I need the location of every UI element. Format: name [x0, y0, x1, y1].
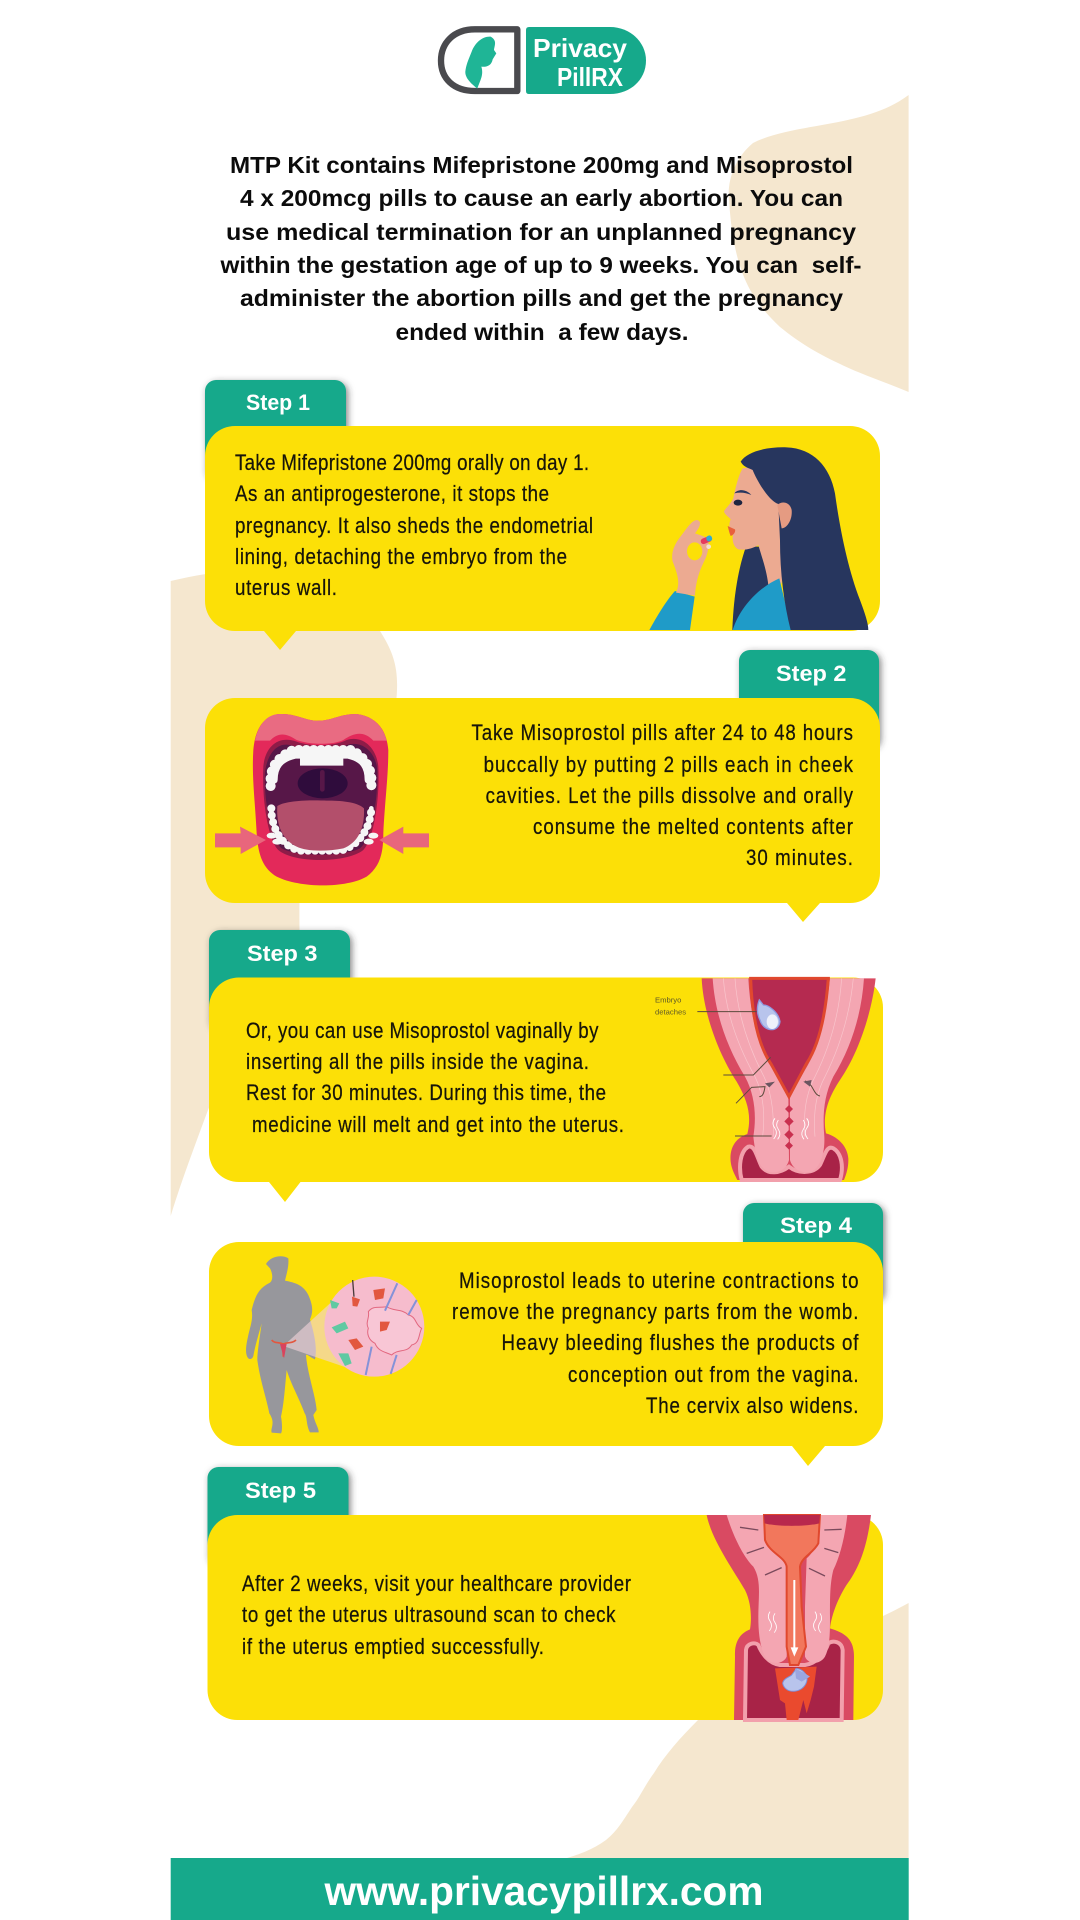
step 2 text	[472, 722, 854, 870]
step 2 text: 30 minutes.	[746, 847, 853, 870]
website url: www.privacypillrx.com	[324, 1868, 764, 1914]
step 1 text: Take Mifepristone 200mg orally on day 1.	[235, 452, 589, 475]
step 3 text: medicine will melt and get into the uterus.	[252, 1114, 624, 1137]
step 4 text: conception out from the vagina.	[568, 1364, 859, 1387]
step 5 tab	[208, 1467, 348, 1565]
upper teeth	[270, 750, 371, 786]
step 1 tab	[205, 380, 346, 480]
step 2 tab	[739, 650, 879, 748]
footer bar	[171, 1858, 909, 1920]
icon: body silhouette with magnified tissue	[246, 1256, 424, 1433]
logo text: Privacy	[533, 33, 628, 63]
logo	[441, 27, 646, 94]
step 4 text: remove the pregnancy parts from the womb.	[452, 1301, 858, 1324]
intro text block: administer the abortion pills and get the pregnancy	[240, 285, 843, 311]
step 3 text: Rest for 30 minutes. During this time, the	[246, 1082, 606, 1105]
lower teeth	[271, 808, 371, 851]
step 1 text: lining, detaching the embryo from the	[235, 546, 567, 569]
step 5 text	[242, 1573, 631, 1659]
icon: uterus with embryo detaching: detaches	[655, 1008, 686, 1017]
step 5 card	[208, 1515, 883, 1720]
step 2 text: buccally by putting 2 pills each in cheek	[484, 754, 854, 777]
intro text block: use medical termination for an unplanned pregnancy	[226, 219, 856, 245]
step 3 text: inserting all the pills inside the vagina.	[246, 1051, 589, 1074]
intro text block: within the gestation age of up to 9 weeks. You can self-	[219, 252, 861, 278]
icon: woman taking pill	[649, 447, 868, 630]
step 4 card	[209, 1242, 883, 1466]
logo: PillRX	[557, 62, 624, 92]
icon: open mouth with arrows	[215, 714, 429, 885]
step 1 heading: Step 1	[246, 390, 310, 415]
panel: step 5	[208, 1467, 883, 1720]
step 2 card	[205, 698, 880, 922]
step 1 card	[205, 426, 880, 650]
icon: uterus with embryo detaching: Embryo	[655, 996, 681, 1005]
step 4 heading: Step 4	[780, 1213, 853, 1238]
step 3 tab	[209, 930, 350, 1030]
step 5 text: After 2 weeks, visit your healthcare provider	[242, 1573, 631, 1596]
step 4 text: Misoprostol leads to uterine contractions to	[459, 1270, 859, 1293]
step 4 text: The cervix also widens.	[646, 1395, 859, 1418]
step 5 text: if the uterus emptied successfully.	[242, 1636, 544, 1659]
step 4 tab	[743, 1203, 883, 1301]
step 4 text: Heavy bleeding flushes the products of	[502, 1332, 859, 1355]
step 5 heading: Step 5	[245, 1478, 316, 1503]
step 2 text: Take Misoprostol pills after 24 to 48 hours	[472, 722, 853, 745]
step 1 text: uterus wall.	[235, 577, 337, 600]
logo woman profile	[465, 37, 496, 89]
background blob: left	[171, 571, 397, 1216]
intro text block	[219, 152, 861, 345]
panel: step 2	[205, 650, 880, 922]
step 3 heading: Step 3	[247, 941, 318, 966]
step 1 text	[235, 452, 593, 600]
step 2 text: cavities. Let the pills dissolve and orally	[486, 785, 854, 808]
intro text block: MTP Kit contains Mifepristone 200mg and Misoprostol	[230, 152, 853, 178]
background blob: top right	[729, 95, 909, 392]
step 2 heading: Step 2	[776, 661, 846, 686]
step 1 text: pregnancy. It also sheds the endometrial	[235, 515, 593, 538]
step 4 text	[452, 1270, 859, 1418]
background blob: bottom right	[567, 1603, 909, 1858]
panel: step 3	[209, 930, 883, 1202]
panel: step 4	[209, 1203, 883, 1466]
logo teal half	[526, 27, 646, 94]
icon: uterus with embryo detaching	[655, 978, 876, 1180]
panel: step 1	[205, 380, 880, 650]
icon: uterus expelling contents	[707, 1515, 871, 1720]
intro text block: 4 x 200mcg pills to cause an early abortion. You can	[240, 185, 843, 211]
step 1 text: As an antiprogesterone, it stops the	[235, 483, 549, 506]
step 5 text: to get the uterus ultrasound scan to check	[242, 1604, 616, 1627]
step 3 text	[246, 1020, 624, 1137]
intro text block: ended within a few days.	[396, 319, 688, 345]
step 2 text: consume the melted contents after	[533, 816, 853, 839]
step 3 text: Or, you can use Misoprostol vaginally by	[246, 1020, 599, 1043]
logo pill outline	[441, 29, 517, 91]
step 3 card	[209, 978, 883, 1202]
